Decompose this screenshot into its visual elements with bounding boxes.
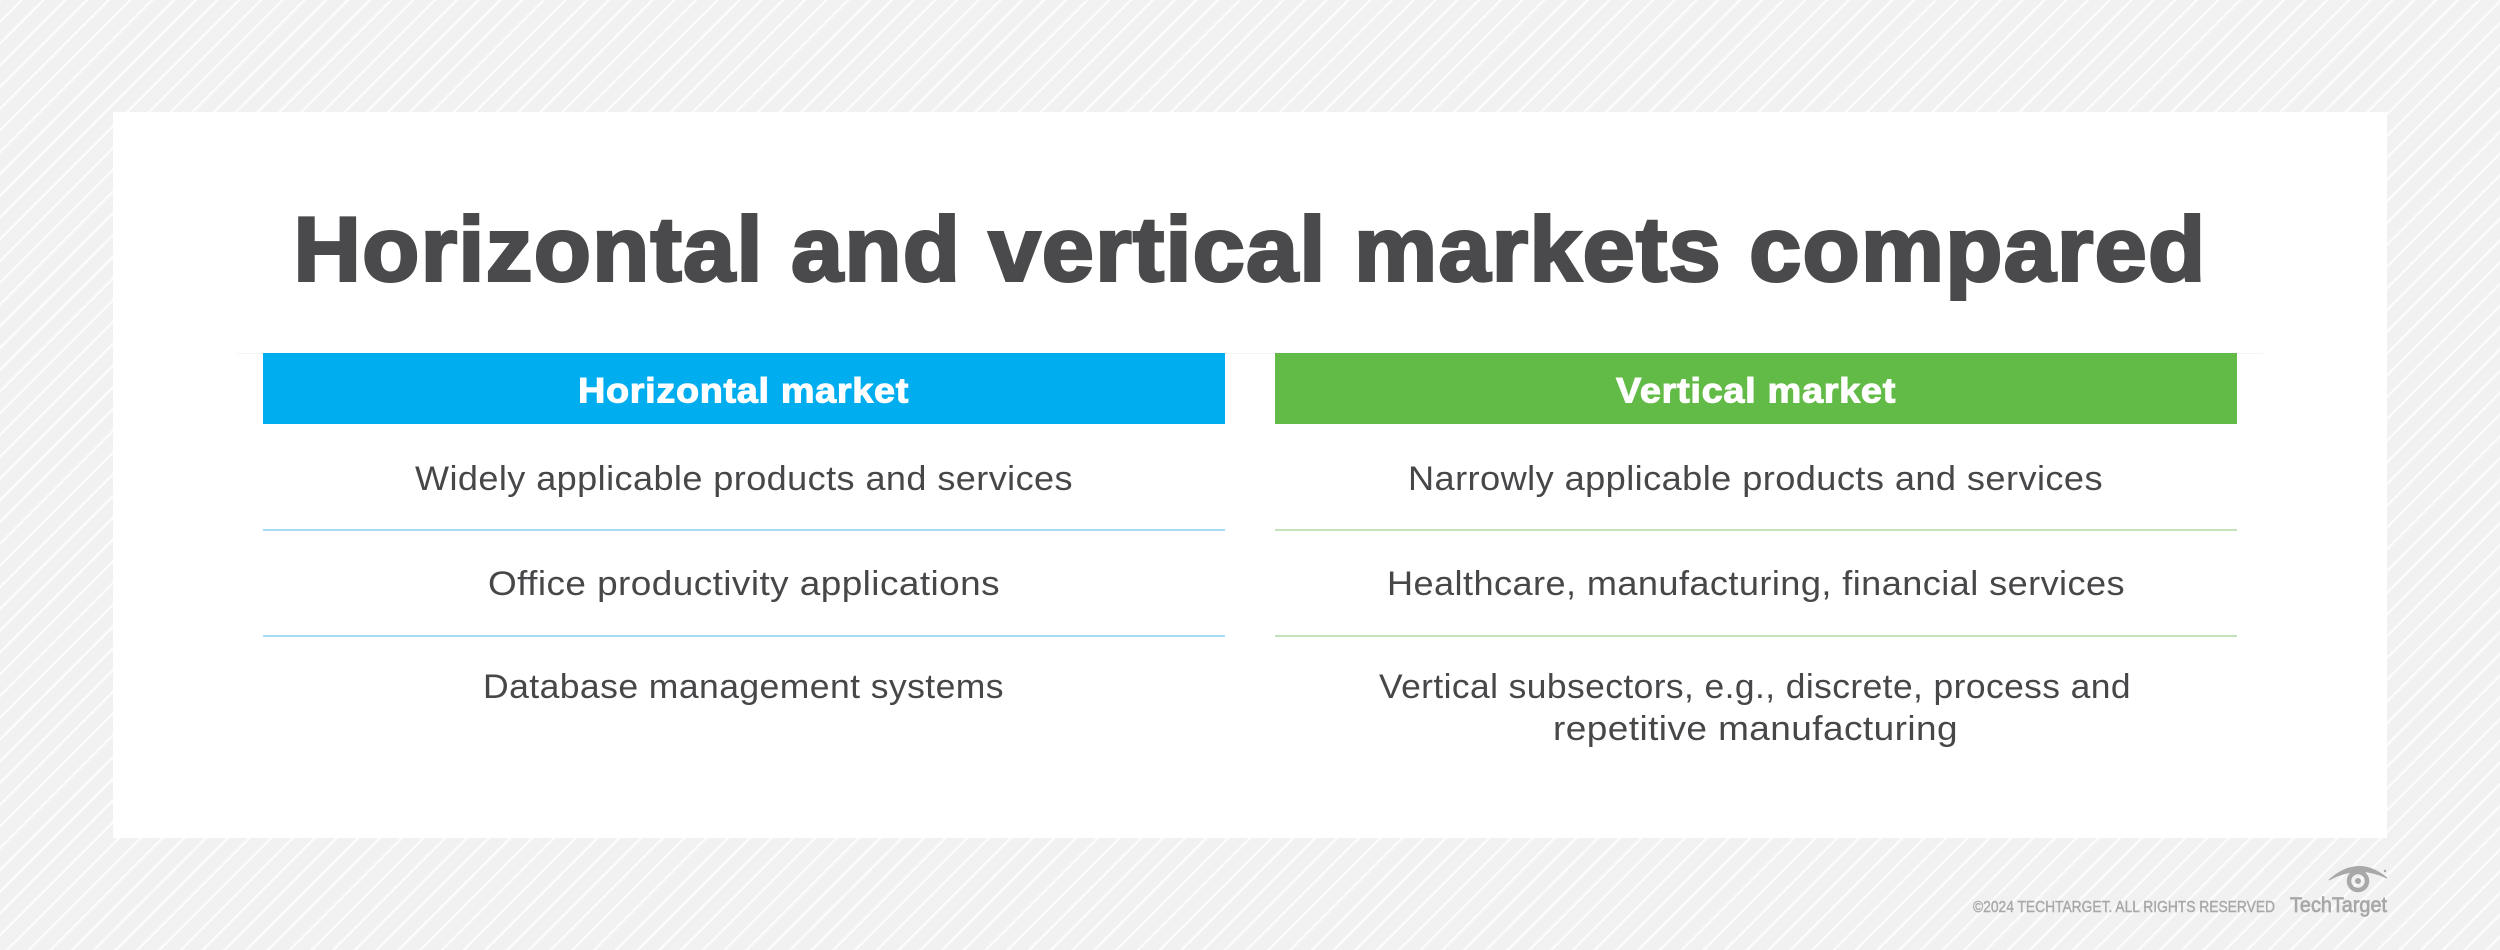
row: vertical subsectors [1379, 668, 2131, 748]
row: narrowly applicable: Narrowly applicable products and services [1408, 460, 2103, 498]
header: horizontal market [263, 353, 1225, 424]
logo: TechTarget [2290, 866, 2387, 917]
white panel [113, 112, 2387, 838]
title: Horizontal and vertical markets compared [294, 200, 2206, 300]
row: vertical subsectors: Vertical subsectors, e.g., discrete, process and [1379, 668, 2131, 706]
row: database management: Database management systems [483, 668, 1004, 706]
row: vertical subsectors: repetitive manufacturing [1553, 710, 1958, 748]
column: horizontal market [263, 353, 1225, 706]
row: healthcare: Healthcare, manufacturing, financial services [1387, 565, 2125, 603]
icon: eye [2329, 866, 2387, 890]
column: vertical market [1275, 353, 2237, 748]
row: office productivity: Office productivity applications [488, 565, 1000, 603]
header: vertical market [1275, 353, 2237, 424]
row: widely applicable: Widely applicable products and services [415, 460, 1073, 498]
header: horizontal market: Horizontal market [578, 372, 909, 410]
logo: TechTarget: TechTarget [2290, 894, 2387, 917]
copyright: ©2024 TECHTARGET. ALL RIGHTS RESERVED [1973, 899, 2275, 916]
header: vertical market: Vertical market [1616, 372, 1896, 410]
